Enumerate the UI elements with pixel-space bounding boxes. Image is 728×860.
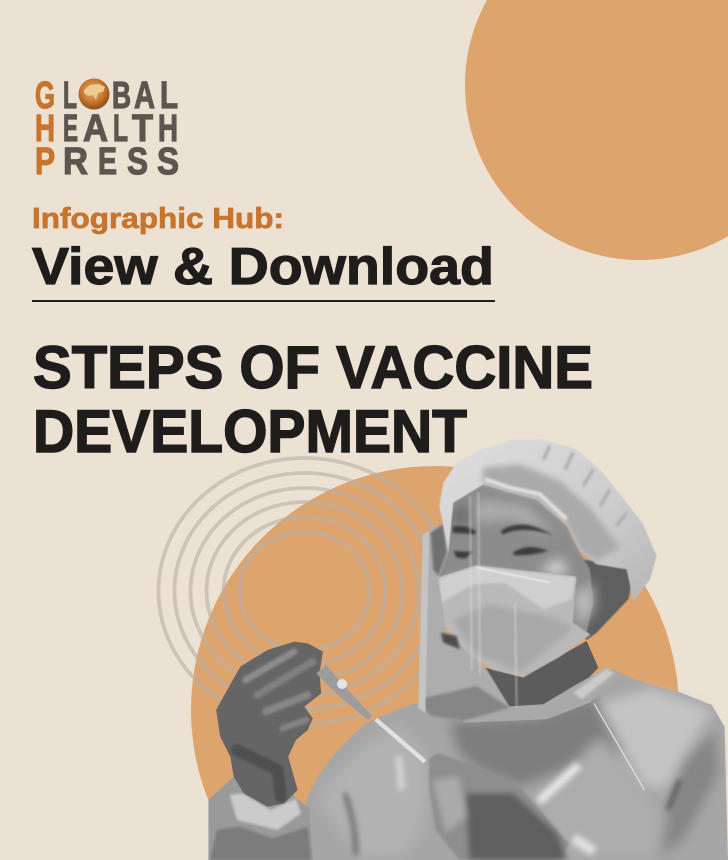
- eyebrows and eyes: [453, 524, 553, 559]
- logo row: HEALTH: T: [132, 108, 153, 150]
- neck: [485, 641, 598, 708]
- face: [438, 484, 593, 676]
- logo: Global Health Press: [35, 75, 179, 183]
- logo row: PRESS: S: [127, 141, 148, 183]
- cuff band: [230, 793, 301, 830]
- gown folds: [345, 757, 680, 855]
- logo row: PRESS: E: [98, 141, 117, 183]
- left hand: [216, 642, 323, 807]
- head and shoulders: [418, 439, 657, 723]
- title: DEVELOPMENT: [33, 398, 467, 465]
- logo row: GLOBAL: G: [35, 75, 55, 117]
- surgical mask: [437, 565, 591, 677]
- cuff lower shading: [210, 827, 311, 860]
- divider under heading: [32, 300, 495, 302]
- logo row: HEALTH: A: [83, 108, 108, 150]
- logo row: PRESS: [35, 141, 179, 183]
- logo row: PRESS: R: [63, 141, 88, 183]
- heading: Infographic Hub: Infographic Hub:: [32, 203, 284, 235]
- logo row: GLOBAL: B: [112, 75, 131, 117]
- logo row: HEALTH: H: [35, 108, 55, 150]
- pipette: [316, 665, 425, 762]
- heading: View & Download: View & Download: [32, 238, 494, 296]
- collar: [460, 668, 618, 723]
- logo row: GLOBAL: A: [134, 75, 155, 117]
- sleeve cuff: [208, 777, 313, 860]
- icon: globe: [78, 78, 110, 110]
- logo row: HEALTH: L: [113, 108, 128, 150]
- concentric rings: [158, 458, 450, 724]
- logo row: PRESS: P: [35, 141, 55, 183]
- hair behind hat: [570, 559, 635, 640]
- lower orange circle: [191, 466, 679, 860]
- hair net: [439, 439, 657, 601]
- title: [33, 334, 593, 465]
- collar rib: [573, 668, 614, 699]
- top right circle: [465, 0, 728, 260]
- title: STEPS OF VACCINE: [33, 334, 593, 401]
- body: [208, 642, 728, 860]
- gown shading: [318, 688, 719, 857]
- logo row: PRESS: S: [157, 141, 179, 183]
- photo: health worker holding pipette: [208, 439, 728, 860]
- logo row: HEALTH: E: [63, 108, 78, 150]
- face shield: [418, 493, 517, 721]
- right hand: [429, 753, 569, 860]
- logo row: GLOBAL: L: [63, 75, 77, 117]
- gown: [306, 668, 728, 860]
- logo row: GLOBAL: L: [160, 75, 178, 117]
- logo row: HEALTH: H: [158, 108, 178, 150]
- logo row: HEALTH: [35, 108, 178, 150]
- raglan seam: [594, 703, 644, 790]
- forehead and cheek highlights: [450, 499, 593, 626]
- logo row: GLOBAL: [35, 75, 178, 117]
